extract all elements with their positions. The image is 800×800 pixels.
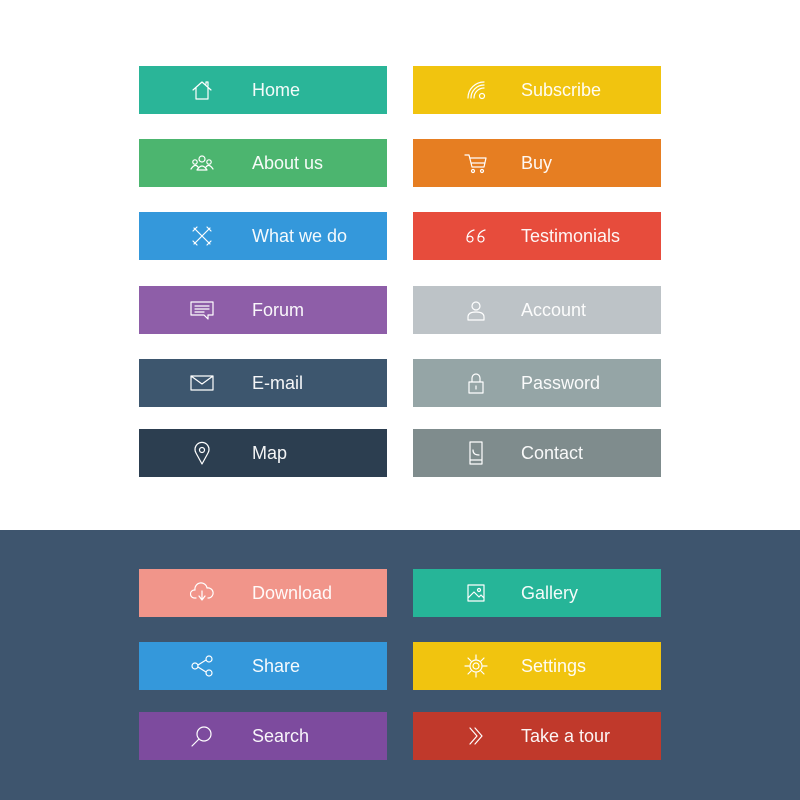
button: Account: Account (521, 300, 586, 320)
button: About us (139, 139, 387, 187)
button: Settings: Settings (521, 656, 586, 676)
button: Home: Home (252, 80, 300, 100)
button: Share (139, 642, 387, 690)
button: Contact (413, 429, 661, 477)
button: Account (413, 286, 661, 334)
button: Forum: Forum (252, 300, 304, 320)
button: Take a tour: Take a tour (521, 726, 610, 746)
button: What we do: What we do (252, 226, 347, 246)
button: What we do (139, 212, 387, 260)
button: Subscribe: Subscribe (521, 80, 601, 100)
button: Password: Password (521, 373, 600, 393)
button: Download (139, 569, 387, 617)
button: Gallery: Gallery (521, 583, 578, 603)
button: Password (413, 359, 661, 407)
button: Take a tour (413, 712, 661, 760)
button: Settings (413, 642, 661, 690)
button: About us: About us (252, 153, 323, 173)
button: Forum (139, 286, 387, 334)
button: Home (139, 66, 387, 114)
button: Subscribe (413, 66, 661, 114)
button: Map (139, 429, 387, 477)
button: Buy (413, 139, 661, 187)
button: Map: Map (252, 443, 287, 463)
button: Download: Download (252, 583, 332, 603)
button: Search: Search (252, 726, 309, 746)
bottom band background (0, 530, 800, 800)
button: Buy: Buy (521, 153, 552, 173)
button: Contact: Contact (521, 443, 583, 463)
button: Testimonials (413, 212, 661, 260)
button: Gallery (413, 569, 661, 617)
button: Search (139, 712, 387, 760)
button: E-mail (139, 359, 387, 407)
button: E-mail: E-mail (252, 373, 303, 393)
button: Share: Share (252, 656, 300, 676)
button: Testimonials: Testimonials (521, 226, 620, 246)
